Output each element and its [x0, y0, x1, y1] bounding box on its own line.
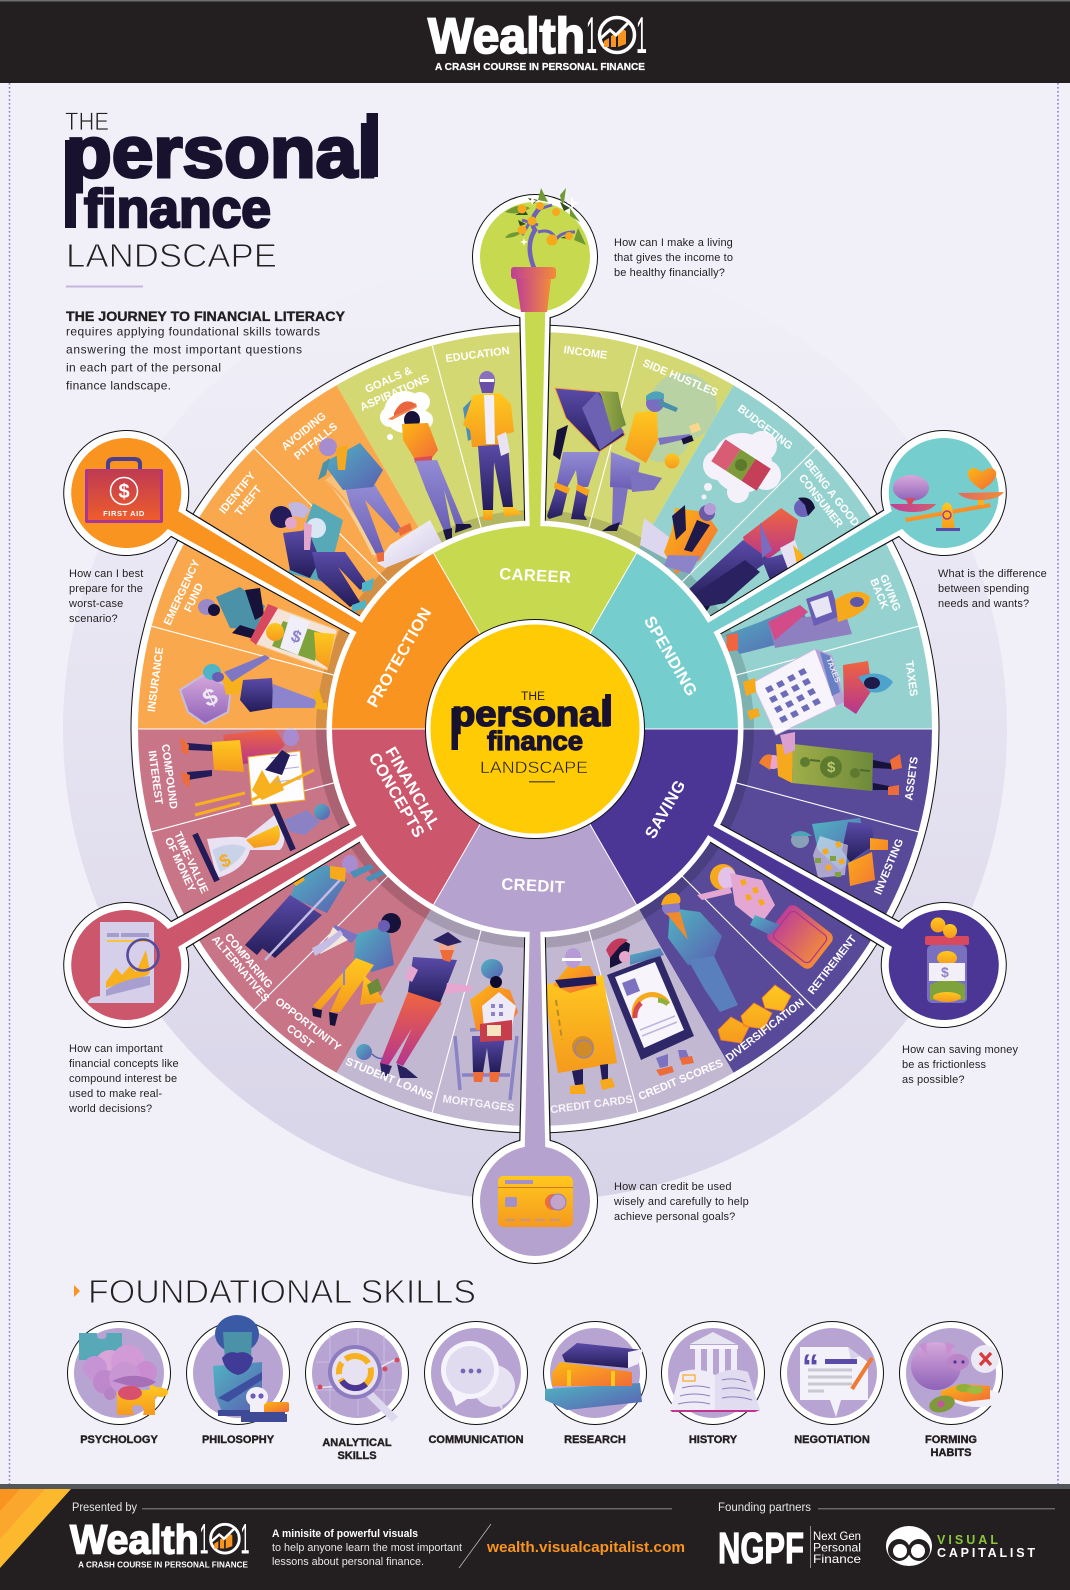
band labels: INCOME [563, 344, 608, 362]
header logo: Wealth [428, 8, 585, 64]
question: protection: worst-case [68, 598, 123, 610]
icon: first aid kit (protection): FIRST AID [103, 509, 145, 518]
question: credit: How can credit be used [614, 1181, 732, 1193]
question: career: How can I make a living [614, 237, 733, 249]
question: financial concepts: compound interest be [69, 1073, 177, 1085]
figure: mortgages [455, 959, 518, 1100]
central circle: finance [487, 726, 583, 756]
skill: negotiation [780, 1321, 884, 1446]
category labels: CREDIT [501, 875, 566, 897]
band labels: FUND [182, 581, 206, 614]
footer: 1 [241, 1515, 250, 1563]
band labels: AVOIDING [280, 410, 329, 453]
sector: saving [484, 641, 1042, 1080]
icon: savings jar (saving): $ [941, 964, 949, 980]
figure: side hustles [602, 373, 717, 531]
title block: LANDSCAPE [66, 238, 277, 275]
icon: first aid kit (protection) [85, 459, 163, 523]
skill: forming habits: FORMING [925, 1434, 977, 1446]
figure: opportunity cost [312, 913, 401, 1026]
logo: NGPF: Next Gen [813, 1529, 861, 1543]
category labels: SPENDING [640, 613, 700, 700]
logo: Visual Capitalist: VISUAL [937, 1533, 998, 1547]
band labels: INVESTING [872, 837, 906, 897]
figure: insurance: $ [199, 683, 223, 713]
question: career: be healthy financially? [614, 267, 725, 279]
central circle [425, 619, 645, 839]
header logo: A CRASH COURSE IN PERSONAL FINANCE [435, 61, 645, 73]
icon: money tree in pot (career) [505, 188, 586, 312]
minisite description: A minisite of powerful visuals [272, 1528, 418, 1540]
figure: giving back [725, 590, 870, 654]
band labels: INTEREST [145, 750, 165, 806]
question: financial concepts: financial concepts like [69, 1058, 179, 1070]
question: protection: scenario? [69, 613, 118, 625]
question: protection [68, 568, 143, 625]
intro text: answering the most important questions [66, 342, 302, 356]
band labels: ASSETS [903, 756, 921, 801]
figure: comparing alternatives [245, 855, 389, 960]
figure: being a good consumer [686, 497, 815, 622]
band labels: RETIREMENT [806, 933, 860, 997]
question: saving: as possible? [902, 1074, 965, 1086]
question: financial concepts: world decisions? [68, 1103, 152, 1115]
band labels [145, 344, 921, 1116]
skill: communication: COMMUNICATION [428, 1434, 524, 1446]
founding partners: Founding partners [718, 1502, 811, 1514]
band labels: INSURANCE [146, 646, 166, 713]
minisite description: lessons about personal finance. [272, 1556, 424, 1568]
skill: psychology: PSYCHOLOGY [80, 1434, 158, 1446]
band: financial concepts [92, 557, 634, 1099]
logo: NGPF: Finance [813, 1552, 861, 1566]
question: saving [902, 1044, 1019, 1086]
figure: compound interest [180, 728, 314, 815]
category labels: PROTECTION [364, 604, 436, 711]
skill: negotiation: NEGOTIATION [794, 1434, 870, 1446]
intro text: finance landscape. [66, 378, 171, 392]
question: saving: How can saving money [902, 1044, 1019, 1056]
question: credit: wisely and carefully to help [613, 1196, 749, 1208]
skill: research: RESEARCH [564, 1434, 626, 1446]
question: career: that gives the income to [614, 252, 733, 264]
figure: education [463, 371, 523, 520]
question: credit [613, 1181, 749, 1223]
skill: negotiation: “ [802, 1348, 819, 1386]
question: protection: prepare for the [69, 583, 143, 595]
question: financial concepts: How can important [69, 1043, 163, 1055]
sector: credit [434, 729, 636, 1256]
title block: THE [65, 108, 109, 136]
figure: diversification [661, 893, 791, 1043]
sector: protection [28, 378, 586, 817]
header bar [0, 0, 1070, 83]
figure: identify theft [270, 502, 374, 612]
title block: finance [84, 179, 271, 239]
skill: analytical skills: ANALYTICAL [322, 1437, 392, 1449]
skill: research [543, 1321, 647, 1446]
minisite description: to help anyone learn the most important [272, 1542, 462, 1554]
band labels: ASPIRATIONS [358, 373, 431, 414]
spoke outlines [40, 194, 1030, 1264]
intro text [66, 309, 345, 392]
band labels: CREDIT SCORES [637, 1057, 725, 1103]
wheel outer band [92, 324, 978, 1134]
figure: credit scores [606, 938, 694, 1076]
question: spending: needs and wants? [938, 598, 1029, 610]
website url: wealth.visualcapitalist.com [486, 1540, 685, 1556]
minisite description [272, 1528, 462, 1568]
figure: investing [790, 818, 888, 886]
sector: career [434, 202, 636, 729]
band labels: GOALS & [363, 365, 414, 396]
band labels: DIVERSIFICATION [724, 997, 807, 1064]
logo: Visual Capitalist: CAPITALIST [937, 1546, 1035, 1560]
footer [0, 1484, 1070, 1590]
figure: retirement [697, 864, 836, 972]
footer logo: Wealth [70, 1516, 199, 1562]
icon: growth report (financial concepts) [88, 922, 158, 1003]
band labels: SIDE HUSTLES [641, 357, 719, 399]
intro text: THE JOURNEY TO FINANCIAL LITERACY [66, 309, 345, 324]
band labels: MORTGAGES [442, 1093, 515, 1115]
question: saving: be as frictionless [902, 1059, 986, 1071]
figure: credit cards [543, 948, 617, 1094]
logo: NGPF: Personal [813, 1540, 861, 1554]
band labels: TAXES [903, 660, 919, 697]
category labels: CAREER [499, 565, 572, 587]
header logo: 1 [586, 7, 597, 65]
figure: emergency fund: $ [288, 626, 304, 647]
skill: forming habits: HABITS [931, 1447, 971, 1459]
title block: personal [66, 113, 378, 193]
band labels: BUDGETING [735, 403, 795, 452]
central circle: THE [521, 691, 545, 703]
skill: communication [424, 1321, 528, 1446]
figure: time-value of money: $ [216, 849, 234, 872]
figure: avoiding pitfalls [318, 438, 443, 568]
icon: scale balancing brain and heart (spending) [890, 468, 1004, 531]
category labels: SAVING [642, 777, 690, 842]
band labels: EMERGENCY [162, 557, 203, 627]
figure: emergency fund [198, 587, 337, 670]
question: spending: between spending [938, 583, 1029, 595]
band labels: PITFALLS [292, 421, 340, 463]
band labels: THEFT [233, 483, 265, 519]
large pale background circle [63, 257, 1007, 1201]
band labels: TIME-VALUE [171, 830, 210, 895]
band: credit [336, 729, 734, 1126]
logo: Visual Capitalist [886, 1526, 1035, 1566]
band labels: ALTERNATIVES [209, 934, 271, 1005]
band labels: EDUCATION [445, 345, 510, 365]
skill: analytical skills [305, 1321, 409, 1462]
icon: credit card (credit) [498, 1176, 573, 1227]
band labels: CONSUMER [796, 472, 845, 530]
band: career [336, 332, 734, 729]
footer orange stripes [0, 1489, 71, 1568]
band labels: COMPARING [222, 931, 275, 991]
band labels: COST [284, 1023, 316, 1051]
category labels: CONCEPTS [365, 750, 428, 841]
category ring and spokes [28, 194, 1042, 1264]
category labels: FINANCIAL [381, 744, 443, 833]
skill: psychology [67, 1321, 171, 1446]
figure: taxes [743, 649, 893, 735]
band: protection [92, 359, 634, 901]
band labels: CREDIT CARDS [550, 1094, 634, 1116]
category labels [364, 565, 700, 897]
band labels: STUDENT LOANS [344, 1056, 435, 1103]
skill: analytical skills: SKILLS [337, 1450, 377, 1462]
intro text: requires applying foundational skills towards [66, 324, 320, 338]
intro text: in each part of the personal [66, 360, 221, 374]
band: spending [436, 359, 978, 901]
logo: NGPF: NGPF [718, 1524, 804, 1573]
question: spending: What is the difference [938, 568, 1047, 580]
title block [65, 108, 378, 288]
skill: philosophy: PHILOSOPHY [202, 1434, 275, 1446]
band labels: BACK [867, 577, 890, 611]
header logo [428, 7, 647, 73]
question: spending [938, 568, 1047, 610]
question: financial concepts: used to make real- [69, 1088, 162, 1100]
figure: assets [759, 732, 902, 795]
figure: time-value of money [195, 802, 330, 881]
band labels: OF MONEY [162, 836, 198, 894]
figure: assets: $ [827, 759, 836, 776]
figure: budgeting [640, 431, 781, 574]
skill: forming habits [899, 1321, 1004, 1459]
band labels: GIVING [877, 573, 903, 613]
band labels: IDENTIFY [217, 469, 259, 516]
foundational skills heading: FOUNDATIONAL SKILLS [88, 1274, 476, 1311]
figure: insurance [180, 655, 327, 724]
icon: first aid kit (protection): $ [118, 481, 130, 503]
icon: savings jar (saving) [925, 918, 969, 1003]
figure: taxes: TAXES [824, 656, 843, 685]
question: protection: How can I best [69, 568, 143, 580]
question: credit: achieve personal goals? [614, 1211, 735, 1223]
band labels: OPPORTUNITY [273, 996, 344, 1054]
footer logo: 1 [200, 1515, 209, 1563]
question: career [614, 237, 733, 279]
central circle: personal [452, 693, 611, 734]
sector: spending [484, 378, 1042, 817]
central circle: LANDSCAPE [480, 758, 588, 777]
band: saving [436, 557, 978, 1099]
figure: income [547, 388, 626, 520]
skill: history [661, 1321, 765, 1446]
footer logo [70, 1515, 250, 1569]
figure: student loans [356, 932, 472, 1078]
header bar: 1 [636, 7, 647, 65]
question: financial concepts [68, 1043, 179, 1115]
figure: goals and aspirations [380, 391, 472, 540]
footer logo: A CRASH COURSE IN PERSONAL FINANCE [78, 1559, 248, 1569]
band labels: BEING A GOOD [801, 457, 861, 529]
skill: philosophy [186, 1315, 290, 1446]
skill: history: HISTORY [689, 1434, 738, 1446]
band labels: COMPOUND [159, 743, 179, 810]
presented by: Presented by [72, 1502, 137, 1514]
sector: financial concepts [28, 641, 586, 1080]
